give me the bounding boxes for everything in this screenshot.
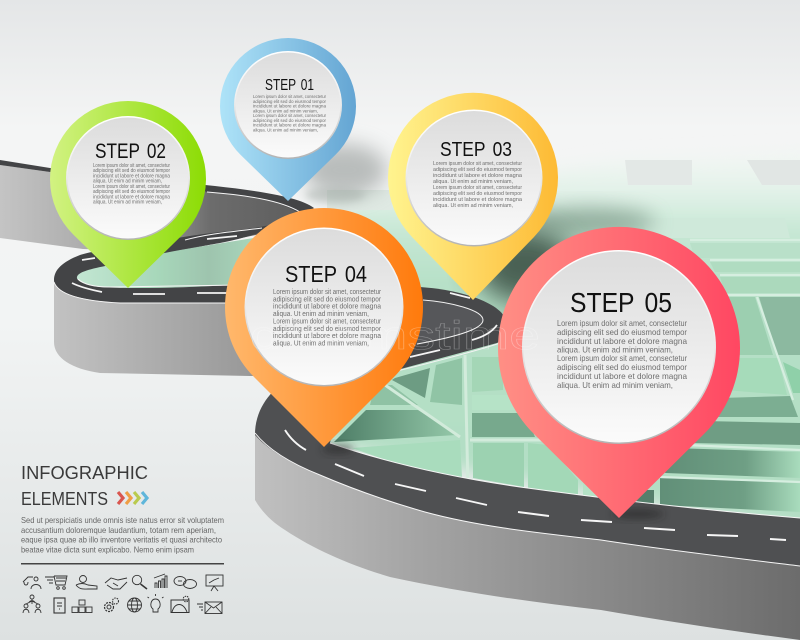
- heading: step 01: STEP 01: [265, 77, 314, 94]
- icon: email: [197, 602, 222, 614]
- body: step 04: incididunt ut labore et dolore magna: [273, 304, 381, 311]
- body: step 01: Lorem ipsum dolor sit amet, consectetur: [253, 94, 326, 99]
- body: step 03: incididunt ut labore et dolore magna: [433, 173, 523, 179]
- pin contact shadow: step 05: [612, 509, 664, 519]
- wall: foreground road side: [255, 435, 800, 640]
- title: infographic elements: ELEMENTS: [21, 488, 108, 509]
- icon: blocks: [72, 600, 92, 612]
- pin: step 05: [498, 227, 740, 518]
- body: step 04: aliqua. Ut enim ad minim veniam,: [273, 340, 369, 348]
- body: step 04: [273, 289, 382, 348]
- icon: image with gear: [171, 596, 189, 612]
- icon: chat bubbles: [174, 576, 196, 588]
- body: step 04: Lorem ipsum dolor sit amet, consectetur: [273, 318, 382, 326]
- body: step 01: incididunt ut labore et dolore magna: [253, 122, 326, 128]
- body: step 05: aliqua. Ut enim ad minim veniam,: [557, 380, 673, 390]
- wall: upper road side: [0, 165, 302, 252]
- body: step 04: aliqua. Ut enim ad minim veniam,: [273, 311, 369, 318]
- title: infographic elements: [21, 462, 148, 509]
- body: step 03: incididunt ut labore et dolore magna: [433, 197, 523, 203]
- icon: bar chart: [154, 574, 167, 588]
- body: step 02: Lorem ipsum dolor sit amet, consectetur: [93, 163, 170, 169]
- icon: people flow: [23, 577, 41, 589]
- body: step 02: adipiscing elit sed do eiusmod tempor: [93, 189, 170, 195]
- road edges: [255, 433, 800, 566]
- pin: step 03: [388, 93, 558, 300]
- body: step 01: aliqua. Ut enim ad minim veniam,: [253, 108, 318, 113]
- body: step 03: adipiscing elit sed do eiusmod tempor: [433, 167, 522, 173]
- body: step 05: aliqua. Ut enim ad minim veniam,: [557, 344, 673, 354]
- icon: presentation board: [206, 575, 223, 591]
- body: step 04: Lorem ipsum dolor sit amet, consectetur: [273, 289, 382, 296]
- heading: step 05: STEP 05: [570, 287, 672, 318]
- body: step 05: incididunt ut labore et dolore magna: [557, 371, 687, 381]
- city map: [300, 150, 800, 535]
- body: step 03: Lorem ipsum dolor sit amet, consectetur: [433, 185, 522, 191]
- body: step 04: adipiscing elit sed do eiusmod tempor: [273, 296, 382, 303]
- body: step 03: Lorem ipsum dolor sit amet, consectetur: [433, 161, 522, 167]
- lane dashes: [285, 430, 786, 540]
- pin contact shadow: step 04: [322, 444, 354, 454]
- description text: Sed ut perspiciatis unde omnis iste natus error sit voluptatem: [21, 515, 224, 525]
- description text: eaque ipsa quae ab illo inventore veritatis et quasi architecto: [21, 534, 222, 544]
- body: step 02: [93, 163, 170, 206]
- icon: light bulb: [148, 594, 164, 612]
- pin: step 02: [50, 101, 206, 288]
- heading: step 02: STEP 02: [95, 140, 166, 163]
- body: step 03: aliqua. Ut enim ad minim veniam,: [433, 203, 513, 209]
- wall: left bend side: [54, 280, 330, 376]
- icon: handshake: [105, 578, 127, 589]
- icon row: [23, 574, 223, 614]
- body: step 02: aliqua. Ut enim ad minim veniam,: [93, 179, 162, 185]
- road segment: foreground curve: [255, 372, 800, 640]
- foreground road surface: [255, 372, 800, 566]
- icon: coloured chevrons: [118, 492, 147, 504]
- inner green of left bend: [77, 237, 300, 288]
- body: step 02: incididunt ut labore et dolore magna: [93, 194, 170, 200]
- pin shadows: [303, 144, 655, 303]
- top road surface: [0, 160, 314, 214]
- title: infographic elements: INFOGRAPHIC: [21, 462, 148, 483]
- body: step 02: incididunt ut labore et dolore magna: [93, 174, 170, 180]
- body: step 05: [557, 318, 687, 390]
- body: step 02: aliqua. Ut enim ad minim veniam,: [93, 200, 162, 206]
- body: step 05: incididunt ut labore et dolore magna: [557, 336, 687, 346]
- description text: beatae vitae dicta sunt explicabo. Nemo enim ipsam: [21, 544, 194, 554]
- left bend road surface: [54, 208, 330, 303]
- body: step 01: [253, 94, 326, 132]
- watermark: dreamstime: [250, 314, 540, 358]
- description text: accusantium doloremque laudantium, totam rem aperiam,: [21, 525, 216, 535]
- body: step 03: adipiscing elit sed do eiusmod tempor: [433, 191, 522, 197]
- body: step 01: adipiscing elit sed do eiusmod tempor: [253, 118, 326, 123]
- description text: [21, 515, 224, 554]
- icon: magnifier: [132, 575, 147, 589]
- body: step 01: incididunt ut labore et dolore magna: [253, 104, 326, 108]
- body: step 01: Lorem ipsum dolor sit amet, consectetur: [253, 113, 326, 118]
- icon: gears: [104, 598, 118, 612]
- body: step 04: adipiscing elit sed do eiusmod tempor: [273, 326, 382, 333]
- body: step 05: Lorem ipsum dolor sit amet, consectetur: [557, 318, 687, 328]
- body: step 01: adipiscing elit sed do eiusmod tempor: [253, 99, 326, 104]
- body: step 02: Lorem ipsum dolor sit amet, consectetur: [93, 184, 170, 190]
- heading: step 03: STEP 03: [440, 138, 512, 161]
- icon: team hierarchy: [23, 595, 41, 613]
- icon: shopping cart: [45, 576, 67, 589]
- heading: step 04: STEP 04: [285, 261, 367, 287]
- body: step 02: adipiscing elit sed do eiusmod tempor: [93, 168, 170, 174]
- body: step 03: aliqua. Ut enim ad minim veniam,: [433, 179, 513, 185]
- road edge and lane markings: [54, 192, 330, 303]
- icon: hand with coin: [76, 576, 97, 589]
- body: step 05: Lorem ipsum dolor sit amet, consectetur: [557, 353, 687, 363]
- pin: step 04: [225, 208, 423, 447]
- body: step 05: adipiscing elit sed do eiusmod tempor: [557, 327, 687, 337]
- road segment: right loop: [340, 287, 507, 385]
- body: step 03: [433, 161, 523, 209]
- pin: step 01: [220, 38, 356, 201]
- icon: globe: [128, 598, 142, 612]
- icon: tablet: [54, 598, 65, 613]
- road segment: upper winding road: [0, 160, 330, 376]
- body: step 04: incididunt ut labore et dolore magna: [273, 333, 381, 340]
- body: step 05: adipiscing elit sed do eiusmod tempor: [557, 362, 687, 372]
- body: step 01: aliqua. Ut enim ad minim veniam,: [253, 127, 318, 132]
